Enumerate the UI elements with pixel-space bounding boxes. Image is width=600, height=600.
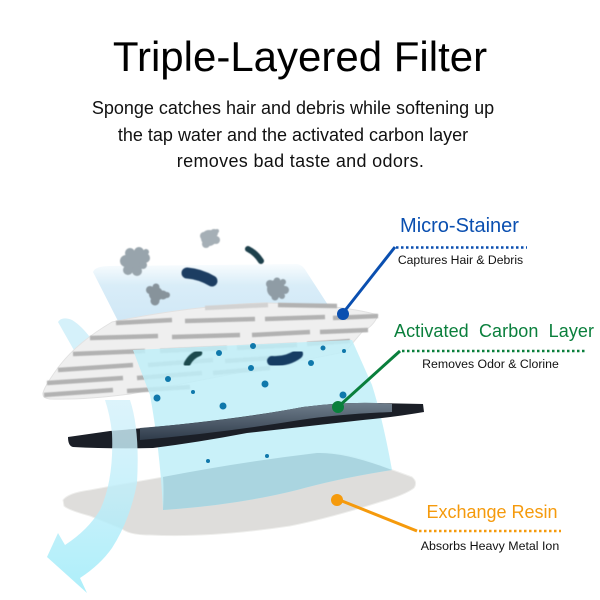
label: exchange resin: [331, 494, 561, 553]
bacteria through water: [187, 353, 298, 364]
strainer slots: [44, 305, 378, 395]
resin tinted overlap: [163, 453, 392, 510]
title: Triple-Layered Filter: [113, 33, 487, 80]
heading orange: Exchange Resin: [426, 502, 558, 522]
resin layer: [63, 453, 416, 536]
bacterium right: [272, 354, 298, 361]
label: micro-strainer: [337, 215, 527, 320]
leader line green: [338, 351, 400, 407]
leader line orange: [337, 499, 417, 531]
bacterium small: [248, 249, 261, 261]
debris clump 1: [120, 247, 150, 276]
arrow upper tail: [58, 318, 100, 352]
heading blue: Micro-Stainer: [400, 215, 519, 237]
dotted rule orange: [419, 530, 561, 532]
pale upper water panel: [93, 264, 330, 325]
description text: Sponge catches hair and debris while softening up: [92, 98, 494, 118]
leader line blue: [343, 247, 395, 313]
dotted rule green: [402, 350, 587, 352]
marker orange: [331, 494, 343, 506]
description text: the tap water and the activated carbon layer: [118, 125, 468, 145]
dotted rule blue: [396, 246, 527, 249]
debris clump 3: [200, 229, 220, 248]
carbon dark body: [68, 403, 424, 448]
marker blue: [337, 308, 349, 320]
debris and bacteria above filter: [120, 229, 289, 306]
bacterium large: [187, 273, 212, 281]
subtext orange: Absorbs Heavy Metal Ion: [421, 539, 559, 553]
subtext green: Removes Odor & Clorine: [422, 357, 559, 371]
label: activated carbon: [332, 321, 594, 413]
bacterium left: [187, 353, 199, 364]
subtext blue: Captures Hair & Debris: [398, 253, 523, 267]
cyan water panel: [133, 340, 392, 510]
debris clump 4: [266, 278, 289, 300]
marker green: [332, 401, 344, 413]
carbon layer: [68, 403, 424, 448]
description text: [92, 98, 494, 171]
illustration: water flow through filter layers: [43, 229, 424, 593]
strainer body: [43, 303, 378, 399]
curved flow arrow: [47, 400, 138, 593]
debris clump 2: [146, 284, 170, 306]
carbon top face: [140, 403, 392, 440]
water particles: [154, 343, 346, 463]
heading green: Activated Carbon Layer: [394, 321, 594, 341]
description text: removes bad taste and odors.: [177, 151, 424, 171]
micro-strainer layer: [43, 303, 378, 399]
